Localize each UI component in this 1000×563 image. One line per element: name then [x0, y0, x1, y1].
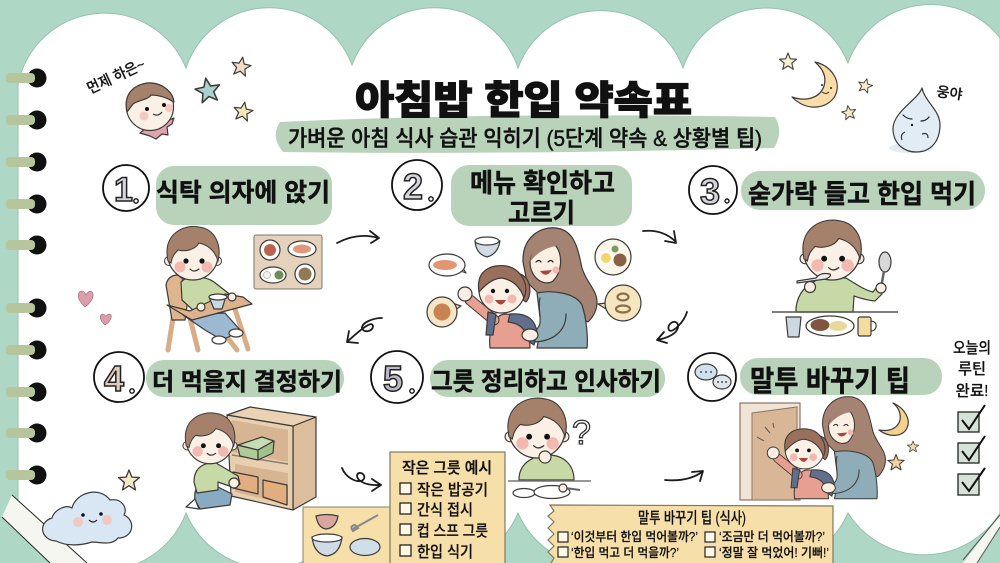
icon: teal star — [194, 76, 222, 104]
door — [740, 403, 800, 500]
note: tone change tips — [548, 505, 833, 563]
step 5 heading — [371, 351, 665, 403]
food bubble: eggs plate — [595, 239, 631, 275]
illustration: child thinking at table — [505, 398, 591, 498]
number badge 4: 4 — [104, 358, 124, 399]
icon: smiling moon — [792, 62, 837, 107]
number badge 4 — [94, 352, 144, 402]
tone tip heading — [688, 353, 942, 401]
subtitle with swash: 가벼운 아침 식사 습관 익히기 (5단계 약속 & 상황별 팁) — [288, 126, 762, 151]
green box — [237, 437, 274, 460]
tip items: ‘정말 잘 먹었어! 기뻐!’ — [719, 546, 829, 560]
number badge 1: 1 — [114, 171, 133, 209]
checkbox list: 한입 식기 — [417, 543, 473, 561]
label: baby speech: 먼제 하은~ — [85, 56, 148, 98]
shelf — [227, 407, 316, 510]
icon: baby — [126, 83, 174, 139]
step 4 label: 더 먹을지 결정하기 — [152, 369, 342, 396]
arrow: step 5 to tips — [665, 471, 703, 481]
text: drop sleepy sound: 웅야 — [936, 83, 964, 103]
icon: speech bubbles badge — [688, 353, 736, 401]
step 2 label: 메뉴 확인하고 — [470, 168, 615, 198]
step 1 label — [156, 166, 332, 225]
icon: peach star — [230, 56, 252, 77]
menu card with four plates — [254, 235, 322, 289]
arrow: step 2 to 5 with loop — [347, 318, 382, 343]
icon: sleepy water drop — [889, 88, 940, 153]
icon: crescent moon — [879, 403, 908, 435]
number badge 2: 2 — [403, 166, 423, 207]
food bubble: snack — [598, 285, 641, 321]
illustration: child eating with spoon — [772, 220, 898, 337]
step 5 label: 그릇 정리하고 인사하기 — [431, 368, 661, 396]
step 1 label: 식탁 의자에 앉기 — [156, 179, 330, 207]
food bubble: rice bowl — [475, 237, 500, 257]
checkbox list: 간식 접시 — [417, 501, 473, 519]
icon: small heart — [100, 314, 111, 325]
routine complete label — [953, 339, 991, 400]
arrow: step 1 to 2 — [337, 231, 379, 243]
tone tip label — [740, 358, 942, 398]
icon: star right of moon — [857, 77, 874, 94]
number badge 2 — [392, 160, 442, 210]
icon: star under moon — [841, 104, 857, 120]
note: small dish examples — [390, 452, 505, 563]
spiral binding rings — [6, 68, 46, 484]
step 2 label — [451, 165, 632, 228]
note title: 작은 그릇 예시 — [402, 459, 492, 477]
step 3 heading — [689, 166, 985, 214]
checkbox list: 작은 밥공기 — [417, 481, 488, 499]
step 3 label: 숟가락 들고 한입 먹기 — [748, 179, 976, 209]
bowls illustration card — [303, 507, 391, 563]
tip items: ‘이것부터 한입 먹어볼까?’ — [571, 530, 698, 544]
routine check boxes — [958, 405, 985, 495]
checkbox list: 컵 스프 그릇 — [417, 522, 488, 540]
number badge 3 — [689, 166, 737, 214]
illustration: mother and child at door — [740, 397, 885, 500]
icon: star above moon — [779, 53, 797, 69]
drawers — [233, 472, 258, 494]
step 1 heading — [103, 165, 332, 225]
routine complete label: 루틴 — [958, 360, 986, 378]
icon: cloud — [43, 492, 132, 545]
food bubble: mixed dish — [427, 297, 461, 327]
number badge 5: 5 — [383, 358, 403, 399]
step 4 heading — [94, 352, 344, 402]
tip items — [558, 530, 829, 560]
icon: large heart — [78, 291, 93, 307]
number badge 3: 3 — [700, 171, 720, 212]
routine complete label: 오늘의 — [953, 339, 991, 357]
illustration: child at storage shelf — [183, 407, 316, 510]
note title: 말투 바꾸기 팁 (식사) — [638, 509, 746, 527]
step 2 heading — [392, 160, 632, 228]
subtitle with swash — [276, 115, 779, 153]
arrow: step 2 to 3 — [643, 231, 676, 243]
number badge 5 — [371, 351, 423, 403]
title: 아침밥 한입 약속표 — [355, 80, 692, 123]
illustration: mother and child with food options — [427, 228, 641, 348]
food bubble: salmon plate — [429, 254, 466, 276]
icon: yellow star — [232, 101, 254, 122]
arrow: step 3 to 4 with loop — [657, 312, 687, 343]
icon: star above cloud — [119, 470, 139, 490]
routine complete label: 완료! — [956, 382, 988, 400]
icon: question mark: ? — [572, 414, 591, 452]
number badge 1 — [103, 165, 149, 211]
tip items: ‘한입 먹고 더 먹을까?’ — [571, 546, 679, 560]
checkbox list — [400, 481, 488, 561]
step 2 label: 고르기 — [508, 198, 575, 228]
tip items: ‘조금만 더 먹어볼까?’ — [719, 530, 825, 544]
tone tip label: 말투 바꾸기 팁 — [750, 365, 910, 398]
icon: peach star — [888, 454, 904, 470]
illustration: child in high chair — [164, 226, 252, 350]
corner tape bottom-left — [2, 495, 132, 563]
kneeling boy — [183, 413, 240, 509]
icon: small star — [907, 441, 919, 452]
note: baby doodle — [85, 56, 174, 139]
arrow: step 4 to examples with loop — [342, 468, 381, 491]
corner tape bottom-right — [963, 515, 1000, 563]
